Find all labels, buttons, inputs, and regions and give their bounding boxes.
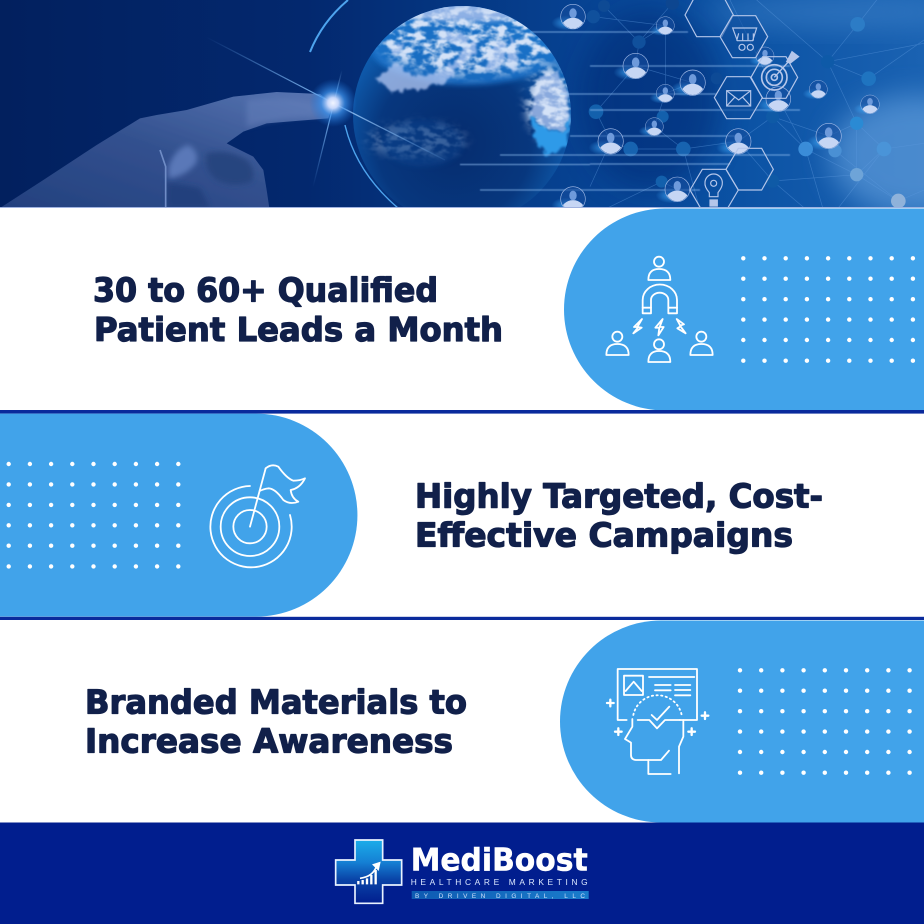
dot pattern 3	[738, 668, 912, 775]
heading: awareness: Increase Awareness	[85, 721, 453, 760]
icon: head with branded materials	[607, 669, 708, 774]
panel: blue pill 1	[564, 208, 924, 410]
logo wordmark: MediBoost	[411, 843, 588, 879]
glowing horizontal light lines	[460, 32, 800, 190]
logo wordmark: HEALTHCARE MARKETING	[411, 877, 588, 887]
logo wordmark: BY DRIVEN DIGITAL, LLC	[415, 893, 585, 900]
heading: campaigns	[415, 477, 823, 554]
hero image: finger touching a globe with a connected network	[0, 0, 924, 230]
divider stripe 2	[0, 617, 924, 620]
logo: medical cross with growth arrow	[336, 840, 402, 903]
divider stripe 1	[0, 410, 924, 414]
row 2	[0, 414, 924, 620]
globe	[353, 6, 571, 207]
heading: leads: 30 to 60+ Qualified	[93, 271, 438, 310]
logo wordmark	[411, 843, 589, 900]
heading: leads	[93, 271, 503, 349]
icon: target with flag	[210, 465, 305, 567]
heading: awareness: Branded Materials to	[85, 682, 467, 721]
dot pattern 2	[6, 462, 180, 569]
heading: leads: Patient Leads a Month	[94, 310, 503, 349]
sparkle at the fingertip	[206, 37, 445, 187]
orbit arcs around the globe	[310, 0, 398, 208]
row 1	[0, 208, 924, 414]
panel: blue pill 2	[0, 414, 357, 617]
mottled cloud texture	[367, 5, 573, 157]
heading: campaigns: Effective Campaigns	[415, 515, 793, 554]
heading: awareness	[85, 682, 467, 760]
network people and hexagon icons	[551, 0, 879, 213]
footer band with logo	[0, 822, 924, 924]
icon: magnet attracting people	[606, 257, 713, 362]
row 3	[85, 620, 924, 822]
hand pointing at the globe	[0, 92, 333, 208]
panel: blue pill 3	[560, 620, 924, 822]
heading: campaigns: Highly Targeted, Cost-	[415, 477, 823, 516]
dot pattern 1	[741, 256, 915, 363]
network lines and nodes	[587, 0, 924, 210]
